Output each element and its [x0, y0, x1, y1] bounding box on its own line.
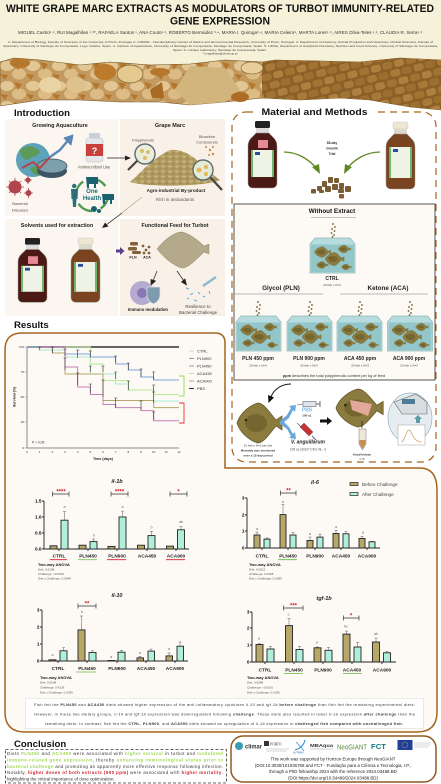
- chart: tgf-1b: c: [288, 612, 290, 616]
- icon: purple arrow: [116, 247, 124, 255]
- chart: survival curves: 7: [115, 450, 117, 454]
- chart: tgf-1b: 0: [247, 660, 250, 665]
- panel: solvents: [5, 219, 118, 316]
- chart: il-1b: a: [121, 505, 124, 509]
- affiliations: 1- Department of Biology, Faculty of Sciences of the University of Porto, Portugal. 2- CIIMAR - Interdisciplinary Center of Marine and Environmental Research, University of Porto, Portugal. 3- Department of Anatomy, Animal Production and Veterinary Clinical Sciences, Faculty of: [8, 40, 433, 44]
- chart: il-6: 1: [242, 529, 245, 534]
- chart: il-1b: Challenge: <0.0001: [38, 572, 64, 576]
- panel: conclusion: [6, 750, 226, 783]
- chart: il-6: Two-way ANOVA: [249, 562, 281, 567]
- chart: il-6: Diet: 0.0012: [249, 568, 266, 572]
- chart: survival curves: 9: [140, 450, 142, 454]
- chart: tgf-1b: ACA900: [373, 668, 392, 674]
- chart: tgf-1b: ***: [290, 604, 298, 610]
- chart: tgf-1b: ACA450: [343, 668, 362, 674]
- chart: il-10: ACA450: [137, 666, 156, 672]
- chart: il-1b: Diet x Challenge: 0.0048: [38, 576, 71, 580]
- icon: feed pellet pile: [311, 177, 351, 198]
- chart: il-1b: ACA450: [138, 554, 157, 560]
- chart: il-1b: Diet: 0.0108: [38, 568, 55, 572]
- panel: conclusion: bacterial challenge and promoting an apparently more effective response following infection.: [7, 764, 223, 769]
- panel: grape marc: [120, 119, 225, 216]
- chart: tgf-1b: a: [316, 640, 319, 644]
- chart: il-6: PLN450: [279, 554, 297, 560]
- heading: conclusion: Conclusion: [14, 739, 66, 750]
- chart: il-1b: ab: [179, 520, 183, 524]
- chart: il-10: a: [51, 653, 54, 657]
- panel: funding: [231, 736, 436, 782]
- logo: neogiant: NeoGIANT: [337, 742, 367, 752]
- label: rich in antioxidants: Rich in antioxidants: [156, 197, 195, 202]
- chart: il-6: Challenge: 0.0428: [249, 572, 274, 576]
- arrows: effects: [151, 271, 186, 285]
- legend: challenge: Before Challenge: [362, 482, 398, 487]
- label: mortality monitoring: [241, 444, 275, 458]
- chart: survival curves: 50: [21, 395, 24, 399]
- arrow: PLN to feed: [284, 152, 320, 174]
- chart: il-6: a: [362, 530, 365, 534]
- label: resilience to bacterial challenge: [179, 304, 218, 315]
- chart: il-6: ACA900: [358, 554, 377, 560]
- icon: ketone bottle: [71, 238, 100, 302]
- label: V. anguillarum: V. anguillarum: [291, 440, 326, 446]
- chart: tgf-1b: *: [350, 614, 353, 620]
- chart: tgf-1b: ab: [374, 632, 378, 636]
- header background: [0, 0, 441, 80]
- arrow: ACA to feed: [344, 152, 380, 174]
- label: pathogen dose: 100 uL (3x10⁷ CFU mL⁻¹): [290, 448, 326, 452]
- chart: survival curves: 100: [19, 345, 24, 349]
- label: bacterial diseases: [12, 201, 28, 212]
- chart: survival curves: 0: [22, 446, 24, 450]
- icon: turbot challenge: [237, 403, 282, 443]
- chart: survival curves: Survival (%): [12, 386, 16, 407]
- chart: il-10: CTRL: [52, 666, 64, 672]
- chart: il-10: il-10: [111, 593, 123, 599]
- chart: il-1b: PLN900: [108, 554, 126, 560]
- tank: ACA 450: [337, 301, 382, 368]
- arrow: branching challenge: [280, 405, 296, 439]
- icon: one health cycle: [71, 177, 114, 213]
- arrow: aquaculture to marc: [107, 156, 131, 160]
- logo: climar: [235, 742, 263, 750]
- panel: solvents: Solvents used for extraction: [21, 223, 93, 229]
- chart: tgf-1b: 2: [247, 626, 250, 631]
- label: polyphenols: Polyphenols: [132, 138, 154, 142]
- chart: tgf-1b: [247, 596, 396, 694]
- tank: ACA 900: [388, 301, 432, 368]
- icon: one health cycle: Health: [83, 196, 102, 202]
- panel: experimental diets: Without Extract: [309, 208, 356, 215]
- chart: il-10: 2: [37, 625, 40, 630]
- legend: survival: PLN900: [197, 356, 212, 361]
- chart: il-1b: b: [150, 526, 153, 530]
- label: head-kidney: n=6: [359, 457, 365, 461]
- icon: growth arrow: [22, 135, 73, 168]
- heading: introduction: Introduction: [14, 108, 70, 119]
- logo: EU flag: [398, 740, 431, 750]
- tank: PLN 900: PLN 900 ppm: [293, 356, 325, 362]
- tank: ACA 900: 20 fish x N=3: [400, 364, 418, 368]
- affiliations: Veterinary, University of Santiago de Compostela, Lugo, Galicia, Spain. 4- Institute of Aquaculture, University of Santiago de Compostela, Santiago de Compostela, Spain. 5- LIDSA, Department of Analytical Chemistry, Nutrition and Food Science, University of Santiago de Compostela,: [3, 44, 438, 48]
- chart: il-6: 2: [242, 513, 245, 518]
- chart: survival curves: 0: [26, 450, 28, 454]
- label: PBS: PBS: [302, 408, 313, 414]
- chart: il-10: Diet x Challenge: 0.0039: [40, 690, 73, 694]
- affiliations: * rmagalhaes@ciimar.up.pt: [203, 52, 238, 56]
- chart: tgf-1b: Two-way ANOVA: [247, 675, 279, 680]
- chart: il-6: a: [335, 525, 338, 529]
- chart: tgf-1b: 1: [247, 643, 250, 648]
- panel: growing aquaculture: Growing Aquaculture: [32, 123, 88, 129]
- chart: tgf-1b: PLN900: [314, 668, 332, 674]
- grape marc and feed pellet band: [0, 58, 441, 110]
- chart: tgf-1b: Diet: 0.0089: [247, 680, 264, 684]
- title: GENE EXPRESSION: [170, 15, 270, 27]
- chart: il-6: 3: [242, 496, 245, 501]
- panel: growing aquaculture: [5, 119, 118, 216]
- logo: climar: climar: [245, 744, 263, 750]
- label: mortality monitoring: over a 12-day period: [243, 454, 273, 458]
- authors: MIGUEL Castro¹˒², RUI Magalhães ¹˒²*, RAFAELA Santos ¹, ANA Couto¹˒², ROBERTO Bermúdez ³˒⁴, MARIA I. Quiroga³˒⁴, MARIA Celeiro⁵, MARTA Lores⁵˒⁶, AIRES Oliva-Teles ¹˒², CLÁUDIA R. Serra¹˒²: [18, 30, 423, 35]
- title: [6, 3, 434, 27]
- label: bioactive compounds: Bioactive: [199, 134, 216, 139]
- chart: il-6: a: [256, 527, 259, 531]
- label: 85-day growth trial: Growth: [326, 147, 338, 151]
- label: agro-industrial by-product: Agro-industrial By-product: [147, 188, 206, 193]
- icon: magnifier compounds: [193, 160, 222, 190]
- tank: ACA 450: ACA 450 ppm: [344, 356, 377, 362]
- text: funding statement: through a PhD fellowship 2024 with the reference 2024.03488.BD: [269, 769, 397, 774]
- affiliations: [3, 40, 438, 56]
- icon: turbot: [157, 232, 209, 268]
- text box: results summary: Fish fed the PLN450 and ACA450 diets showed higher expression of the anti-inflammatory cytokines il-10 and tgf-1b before challenge than fish fed the remaining experimental diets.: [34, 702, 415, 707]
- icon: glycol bottle: [18, 238, 47, 302]
- chart: il-1b: b: [93, 534, 95, 538]
- tank: PLN 900: [287, 301, 332, 368]
- chart: survival curves: 2: [51, 450, 53, 454]
- chart: survival curves: 25: [21, 420, 24, 424]
- text: funding statement: This work was supported by Horizon Europe through NeoGIANT: [271, 756, 396, 762]
- text: funding statement: (DOI:10.3030/101036768 and FCT - Fundação para a Ciência e Tecnologia, I.P.,: [255, 763, 411, 768]
- chart: il-6: CTRL: [256, 554, 268, 560]
- chart: il-10: a: [168, 647, 171, 651]
- panel: experimental diets: [234, 204, 435, 380]
- label: resilience to bacterial challenge: Bacterial Challenge: [179, 310, 218, 315]
- chart: il-1b: *: [177, 490, 180, 496]
- chart: tgf-1b: CTRL: [259, 668, 271, 674]
- panel: conclusion: Diets PLN450 and ACA450 were associated with higher survival in turbot and modulated: [7, 751, 223, 756]
- chart: survival curves: P > 0.05: [32, 440, 44, 444]
- tank: CTRL: 20 fish x N=3: [323, 283, 341, 287]
- heading: material and methods: Material and Methods: [262, 107, 368, 117]
- text box: results summary: [26, 698, 424, 728]
- chart: il-6: PLN900: [306, 554, 324, 560]
- chart: il-10: Two-way ANOVA: [40, 675, 72, 680]
- icon: antimicrobial bottle: ?: [92, 146, 97, 156]
- icon: qPCR analysis: [388, 393, 432, 445]
- chart: survival curves: Time (days): [93, 457, 114, 461]
- icon: dissected turbot: [336, 389, 383, 427]
- chart: tgf-1b: Diet x Challenge: 0.0256: [247, 690, 280, 694]
- chart: tgf-1b: tgf-1b: [316, 596, 332, 602]
- chart: il-10: a: [139, 651, 142, 655]
- chart: il-1b: a: [63, 505, 66, 509]
- affiliations: Spain. 6- i-Grape Laboratory, Santiago de Compostela, Spain.: [173, 48, 267, 52]
- icon: syringe and bacteria: [186, 277, 216, 301]
- label: PLN: PLN: [129, 256, 137, 260]
- chart: survival curves: 1: [39, 450, 41, 454]
- chart: il-1b: 0.5: [35, 531, 42, 536]
- label: 85-day growth trial: 85-day: [327, 141, 337, 145]
- legend: survival: CTRL: [197, 348, 208, 354]
- tank: CTRL: CTRL: [325, 276, 339, 282]
- tank: ACA 450: 20 fish x N=3: [351, 364, 369, 368]
- tank: PLN 450: 20 fish x N=3: [249, 364, 267, 368]
- logo: nutrimu: NUTRIMU: [293, 752, 304, 754]
- chart: survival curves: [12, 345, 184, 461]
- chart: il-1b: 1.0: [35, 515, 42, 520]
- icon: magnifier polyphenols: [128, 144, 155, 170]
- chart: survival curves: 8: [127, 450, 129, 454]
- panel: conclusion: highlighting the critical importance of dose optimization.: [7, 776, 115, 782]
- icon: immune cell: [130, 281, 160, 305]
- chart: tgf-1b: a: [258, 636, 261, 640]
- bracket: red survival group: [179, 403, 184, 423]
- tank: CTRL: [310, 223, 355, 287]
- chart: il-6: ACA450: [332, 554, 351, 560]
- arrow: black: [320, 417, 332, 425]
- logo: porto: [264, 741, 289, 751]
- panel: functional feed: Functional Feed for Turbot: [142, 223, 209, 229]
- panel: conclusion: immune-related gene expression, thereby enhancing immunological status prior to: [7, 758, 223, 762]
- grape marc pile: [130, 150, 220, 186]
- heading: results: Results: [14, 320, 49, 331]
- chart: il-1b: ****: [56, 490, 66, 496]
- logo: porto: PORTO: [270, 742, 282, 746]
- chart: il-10: **: [85, 602, 90, 608]
- arrow: to challenge: [268, 384, 291, 403]
- text box: results summary: However, in these two dietary groups, il-10 and tgf-1b expression was downregulated following challenge. These diets also resulted in lower il-1b expression after challenge than the: [34, 712, 415, 716]
- chart: il-1b: ****: [115, 490, 125, 496]
- logo: nutrimu: [293, 740, 305, 754]
- panel: conclusion: Notably, higher doses of both extracts (900 ppm) were associated with higher mortality,: [7, 770, 223, 775]
- chart: il-6: [242, 480, 380, 580]
- legend: survival: ACA900: [197, 378, 213, 384]
- tank: PLN 900: 20 fish x N=3: [300, 364, 318, 368]
- chart: il-1b: 0.0: [35, 547, 42, 552]
- icon: bacteria: [6, 176, 33, 198]
- chart: il-10: Challenge: 0.4139: [40, 686, 65, 690]
- chart: il-6: il-6: [311, 480, 320, 486]
- label: 85-day growth trial: [326, 141, 338, 156]
- chart: il-1b: [35, 479, 189, 580]
- legend: challenge: After Challenge: [362, 492, 394, 497]
- chart: survival curves: 3: [64, 450, 66, 454]
- label: mortality monitoring: 10 fish x N=2 per diet: [244, 444, 272, 448]
- arrow: marc to solvents: [102, 197, 142, 228]
- chart: il-6: 0: [242, 546, 245, 551]
- chart: survival curves: 4: [77, 450, 79, 454]
- chart: il-6: **: [286, 488, 291, 494]
- chart: il-6: a: [309, 532, 312, 536]
- chart: il-10: b: [81, 610, 83, 614]
- text box: results summary: remaining diets. In contrast, fish fed the CTRL, PLN900, and ACA900 diets showed an upregulation of il-1b expression in challenged fish compared with unchallenged fish.: [45, 721, 403, 726]
- chart: survival curves: 6: [102, 450, 104, 454]
- heading: ketone: Ketone (ACA): [368, 285, 408, 292]
- panel: results: [5, 333, 437, 732]
- legend: survival: [189, 348, 213, 391]
- chart: tgf-1b: 3: [247, 610, 250, 615]
- legend: survival: PBS: [197, 386, 205, 391]
- chart: il-10: [37, 593, 188, 694]
- legend: survival: PLN450: [197, 364, 212, 368]
- chart: il-1b: CTRL: [53, 554, 65, 560]
- icon: ACA bottle: [386, 122, 415, 189]
- label: bacterial diseases: Diseases: [12, 208, 28, 212]
- icon: globe: [16, 143, 50, 177]
- label: 85-day growth trial: Trial: [329, 152, 335, 156]
- chart: il-10: PLN450: [78, 666, 96, 672]
- chart: il-10: ACA900: [166, 666, 185, 672]
- chart: tgf-1b: PLN450: [285, 668, 303, 674]
- icon: one health cycle: One: [86, 189, 98, 195]
- logo: mbaqua: MBAqua: [310, 743, 333, 749]
- chart: il-10: 1: [37, 642, 40, 647]
- chart: survival curves: 12: [177, 450, 181, 454]
- chart: il-1b: il-1b: [111, 479, 123, 485]
- chart: il-10: 0: [37, 659, 40, 664]
- label: immuno modulation: Immuno modulation: [128, 307, 168, 312]
- chart: survival curves: 5: [89, 450, 91, 454]
- text: funding statement: [255, 756, 411, 780]
- heading: glycol: Glycol (PLN): [262, 285, 300, 292]
- tank: PLN 450: [236, 301, 281, 368]
- label: bioactive compounds: Compounds: [196, 140, 218, 144]
- panel: grape marc: Grape Marc: [155, 123, 185, 129]
- label: bacterial diseases: Bacterial: [12, 201, 28, 206]
- logo: mbaqua: [310, 743, 333, 749]
- label: head-kidney: [353, 452, 371, 461]
- legend: challenge: [350, 482, 398, 497]
- chart: il-10: a: [110, 655, 113, 659]
- chart: il-10: PLN900: [108, 666, 126, 672]
- label: mortality monitoring: Mortality was monitored: [241, 448, 275, 452]
- label: antimicrobial use: Antimicrobial Use: [78, 164, 111, 170]
- chart: il-10: Diet: 0.0508: [40, 680, 57, 684]
- chart: il-1b: Two-way ANOVA: [38, 562, 70, 567]
- icon: fish tank ring: [37, 159, 67, 178]
- chart: il-1b: ACA900: [167, 554, 186, 560]
- chart: il-10: 3: [37, 608, 40, 613]
- icon: PBS syringe: [297, 401, 320, 407]
- chart: il-6: b: [282, 500, 284, 504]
- legend: survival: ACA450: [197, 371, 213, 376]
- icon: compound dots: [205, 146, 214, 156]
- chart: il-1b: 1.5: [35, 499, 42, 504]
- label: ACA: ACA: [143, 256, 151, 260]
- chart: survival curves: 10: [152, 450, 156, 454]
- icon: pathogen syringe: [297, 423, 316, 440]
- panel: functional feed: [116, 219, 225, 316]
- label: bioactive compounds: [196, 134, 218, 144]
- label: PBS volume: 100 uL: [302, 414, 312, 418]
- icon: sample tube: [359, 421, 366, 450]
- label: head-kidney: Head-kidney: [353, 452, 371, 456]
- chart: survival curves: 11: [165, 450, 168, 454]
- tank: ACA 900: ACA 900 ppm: [393, 356, 426, 362]
- panel: material and methods: [232, 106, 436, 462]
- logo: FCT: FCT: [371, 744, 387, 751]
- chart: tgf-1b: bc: [344, 624, 348, 628]
- text: funding statement: (DOI:https://doi.org/10.54499/2024.03488.BD): [288, 776, 378, 780]
- chart: tgf-1b: Challenge: <0.0001: [247, 686, 273, 690]
- note: ppm: ppm describes the total polyphenolic content per kg of feed: [283, 373, 385, 378]
- icon: feed pellets: [128, 242, 150, 254]
- tank: PLN 450: PLN 450 ppm: [242, 356, 274, 362]
- chart: il-6: Diet x Challenge: 0.0289: [249, 576, 282, 580]
- bracket: green survival group: [179, 376, 184, 396]
- chart: il-1b: PLN450: [79, 554, 97, 560]
- icon: PLN bottle: [248, 121, 277, 188]
- label: resilience to bacterial challenge: Resilience to: [185, 304, 211, 309]
- chart: survival curves: 75: [21, 370, 24, 374]
